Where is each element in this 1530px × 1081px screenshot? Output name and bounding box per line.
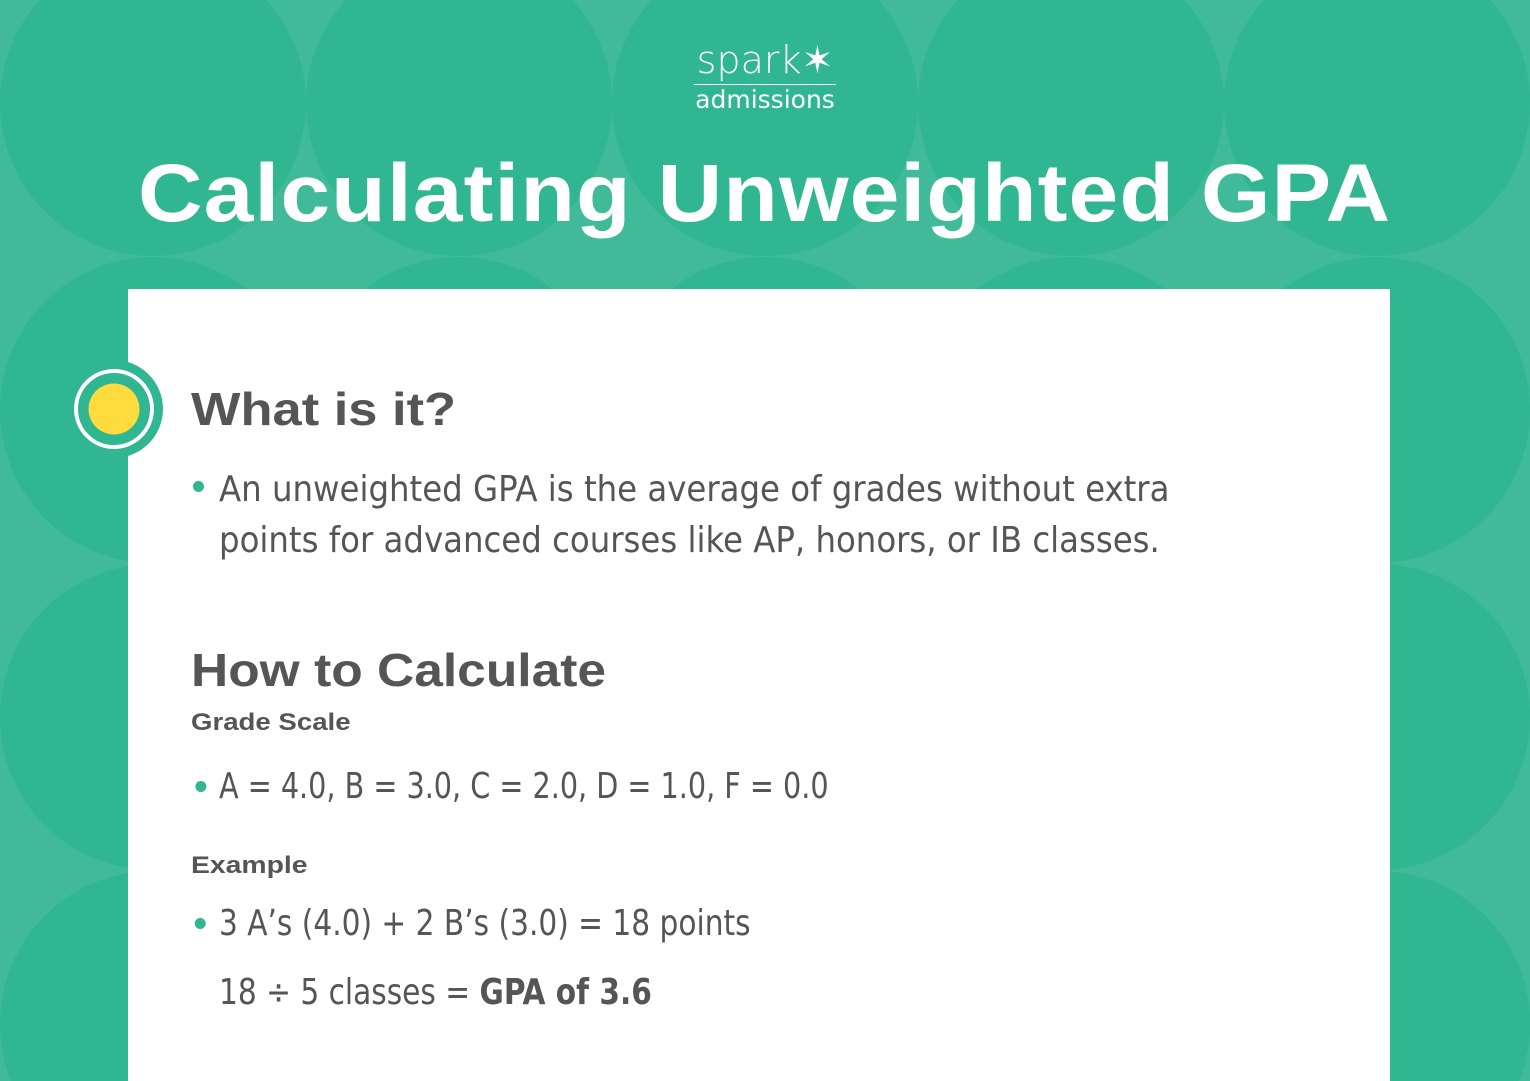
logo: admissions <box>695 85 835 114</box>
text: example: 18 ÷ 5 classes = GPA of 3.6 <box>219 972 652 1013</box>
icon: target circle <box>74 362 163 456</box>
subheading: example: Example <box>191 852 307 879</box>
panel: content card <box>128 289 1390 1081</box>
text: example: 3 A’s (4.0) + 2 B’s (3.0) = 18 points <box>219 903 751 944</box>
logo <box>694 38 836 114</box>
text block: definition: An unweighted GPA is the average of grades without extra points for advanced courses like AP, honors, or IB classes. <box>219 469 1169 561</box>
text: example <box>194 903 751 1013</box>
subheading: grade scale: Grade Scale <box>191 709 351 736</box>
logo: spark✶ <box>697 38 833 82</box>
heading: how to calculate: How to Calculate <box>191 644 606 696</box>
heading: what is it: What is it? <box>191 383 456 435</box>
text: grade scale: A = 4.0, B = 3.0, C = 2.0, D = 1.0, F = 0.0 <box>219 766 829 807</box>
title: Calculating Unweighted GPA <box>138 148 1391 239</box>
